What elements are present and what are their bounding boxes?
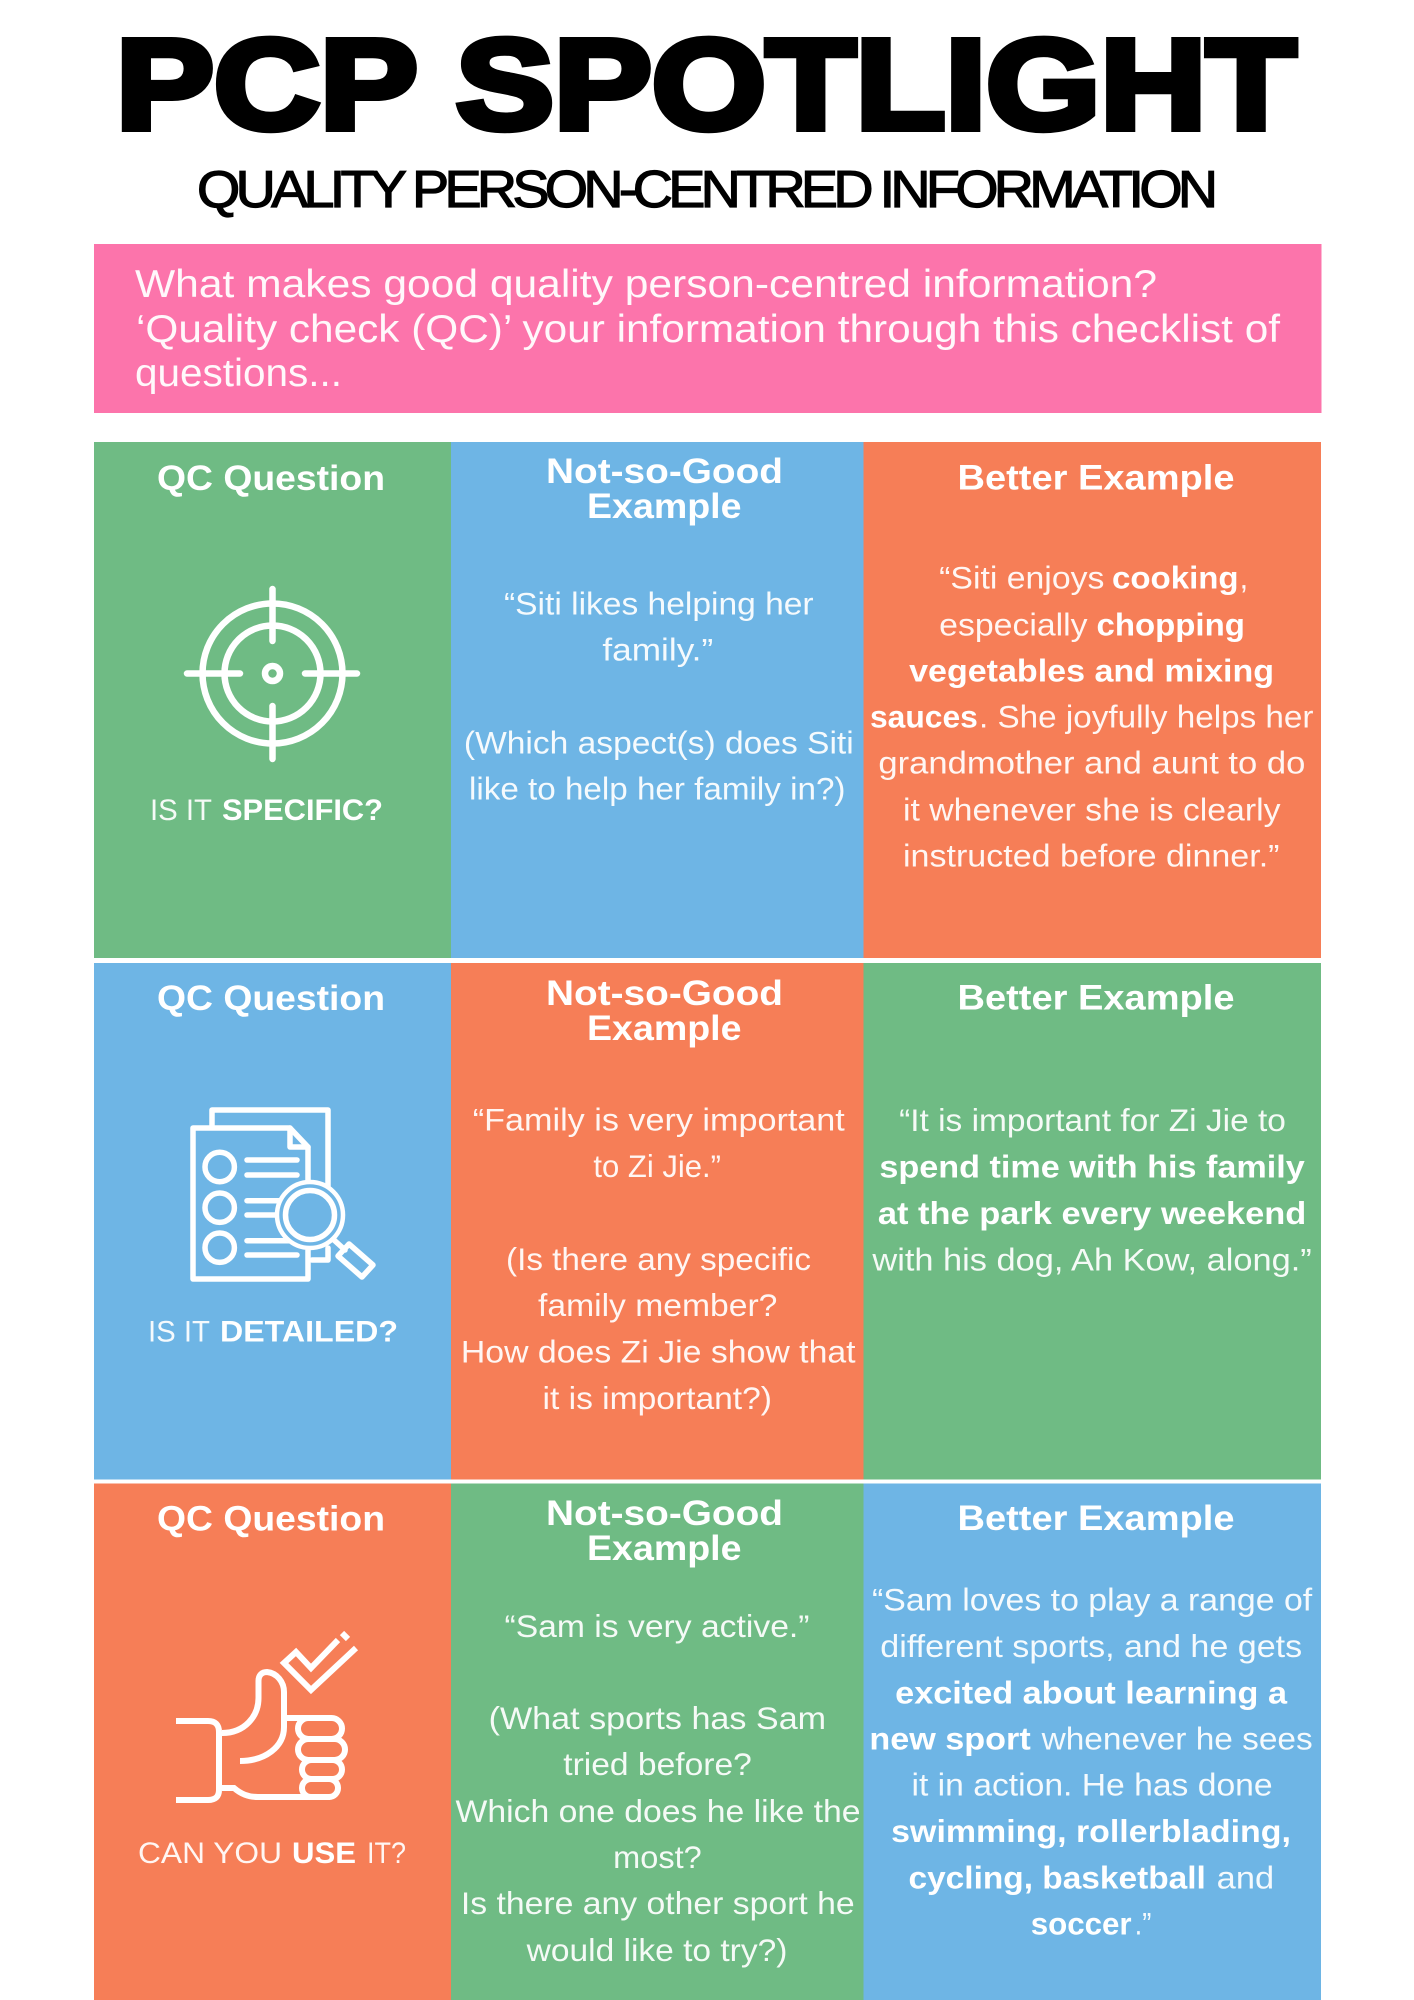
example text: especially (939, 606, 1088, 642)
icon: thumbs up with tick (176, 1633, 356, 1800)
label: can you use it: USE (292, 1837, 356, 1870)
example text: (Is there any specific (506, 1241, 811, 1277)
example text: . She joyfully helps her (979, 698, 1314, 734)
label: is it detailed (148, 1316, 398, 1348)
example text: like to help her family in?) (469, 770, 846, 806)
heading: not-so-good example: Not-so-Good (546, 974, 783, 1013)
heading: better example: Better Example (958, 1499, 1234, 1538)
example text: “Siti likes helping her (504, 586, 814, 622)
panel: row 3 better example (864, 1484, 1321, 2000)
heading: not-so-good example: Not-so-Good (546, 1494, 783, 1533)
label: can you use it (138, 1837, 406, 1870)
example text: cycling, basketball (908, 1860, 1206, 1896)
example text (870, 560, 1314, 874)
panel: row 1 not-so-good example (451, 442, 864, 958)
intro text: What makes good quality person-centred information? (135, 263, 1157, 306)
example text: “Sam is very active.” (504, 1608, 810, 1644)
panel: row 2 QC question (94, 963, 451, 1480)
example text: excited about learning a (895, 1674, 1288, 1710)
example text: it is important?) (542, 1380, 772, 1416)
heading: QC Question: QC Question (157, 979, 385, 1018)
heading: QC Question: QC Question (157, 1500, 385, 1538)
example text: at the park every weekend (878, 1195, 1306, 1231)
example text: “Family is very important (473, 1102, 845, 1138)
example text: most? (613, 1839, 702, 1875)
example text: “Sam loves to play a range of (872, 1582, 1312, 1618)
example text (464, 586, 854, 806)
label: can you use it: IT? (367, 1837, 406, 1870)
example text: , (1240, 560, 1248, 596)
example text: would like to try?) (526, 1932, 787, 1968)
example text: it whenever she is clearly (903, 792, 1281, 828)
heading: QC Question: QC Question (157, 459, 385, 498)
intro text: ‘Quality check (QC)’ your information through this checklist of (136, 308, 1280, 351)
intro banner (94, 244, 1322, 413)
example text: to Zi Jie.” (593, 1148, 721, 1184)
example text: How does Zi Jie show that (461, 1334, 856, 1370)
intro text (135, 263, 1280, 395)
heading: not-so-good example (546, 974, 783, 1048)
example text (461, 1102, 856, 1416)
example text: (Which aspect(s) does Siti (464, 724, 854, 760)
example text: Which one does he like the (456, 1793, 860, 1829)
example text: new sport (869, 1720, 1031, 1756)
example text: “Siti enjoys (939, 560, 1104, 596)
example text: soccer (1031, 1906, 1132, 1942)
example text: cooking (1112, 560, 1239, 596)
example text: swimming, rollerblading, (891, 1813, 1291, 1849)
label: is it detailed: DETAILED? (220, 1316, 398, 1348)
heading: better example: Better Example (958, 978, 1234, 1018)
example text: family member? (538, 1287, 777, 1323)
example text: different sports, and he gets (880, 1628, 1302, 1664)
example text: with his dog, Ah Kow, along.” (871, 1242, 1312, 1278)
intro text: questions... (135, 352, 342, 395)
heading: not-so-good example: Not-so-Good (546, 452, 783, 491)
heading: not-so-good example: Example (587, 1009, 742, 1048)
title: PCP SPOTLIGHT (116, 14, 1296, 156)
heading: not-so-good example: Example (587, 487, 742, 526)
label: is it specific: SPECIFIC? (222, 794, 383, 827)
example text: .” (1135, 1906, 1151, 1942)
label: is it specific: IS IT (150, 794, 212, 827)
label: is it detailed: IS IT (148, 1316, 210, 1348)
panel: row 2 better example (864, 963, 1321, 1480)
example text: sauces (870, 698, 978, 734)
heading: not-so-good example (546, 1494, 783, 1568)
example text: tried before? (563, 1746, 752, 1782)
example text: (What sports has Sam (489, 1700, 826, 1736)
heading: better example: Better Example (958, 458, 1234, 498)
panel: row 2 not-so-good example (451, 963, 864, 1480)
panel: row 3 QC question (94, 1484, 451, 2000)
example text: Is there any other sport he (461, 1885, 855, 1921)
label: can you use it: CAN YOU (138, 1837, 282, 1870)
heading: not-so-good example (546, 452, 783, 526)
example text: vegetables and mixing (909, 652, 1274, 688)
subtitle: QUALITY PERSON-CENTRED INFORMATION (197, 161, 1218, 219)
example text: instructed before dinner.” (903, 838, 1280, 874)
example text (871, 1102, 1312, 1278)
example text (869, 1582, 1313, 1942)
example text: chopping (1096, 606, 1245, 642)
panel: row 1 better example (864, 442, 1321, 958)
example text: grandmother and aunt to do (878, 744, 1305, 780)
panel: row 3 not-so-good example (451, 1484, 864, 2000)
icon: target (187, 589, 357, 759)
example text: it in action. He has done (912, 1766, 1273, 1802)
icon: document and magnifier (193, 1110, 373, 1279)
heading: not-so-good example: Example (587, 1529, 742, 1568)
example text (456, 1608, 860, 1968)
panel: row 1 QC question (94, 442, 451, 958)
example text: spend time with his family (879, 1148, 1305, 1184)
example text: “It is important for Zi Jie to (899, 1102, 1286, 1138)
label: is it specific (150, 794, 383, 827)
example text: and (1217, 1860, 1274, 1896)
example text: family.” (602, 632, 713, 668)
example text: whenever he sees (1041, 1720, 1313, 1756)
